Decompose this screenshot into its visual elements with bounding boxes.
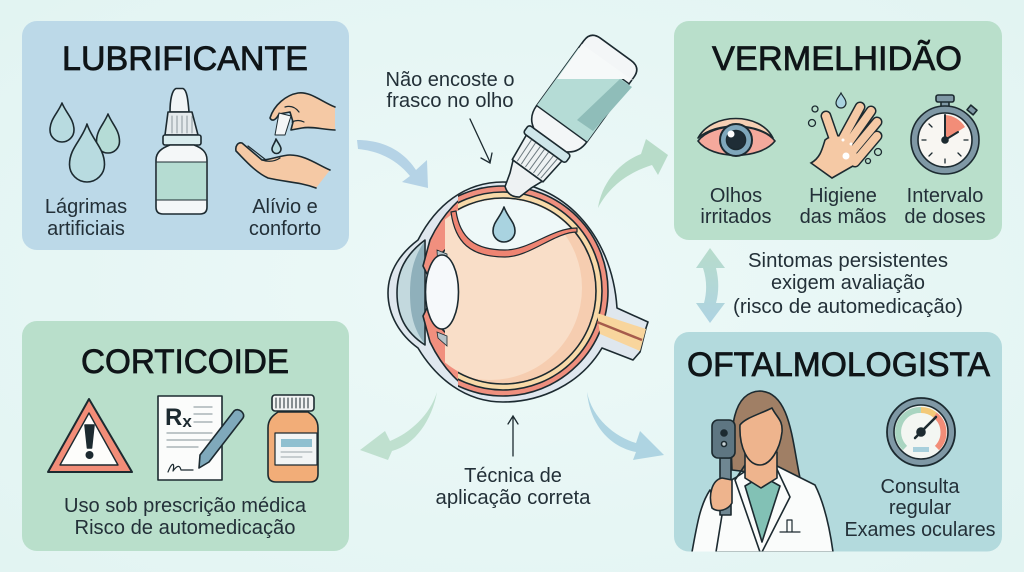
label: lágrimas artificiais bbox=[45, 196, 127, 240]
sclera bbox=[388, 182, 648, 402]
label: intervalo de doses: Intervalo bbox=[907, 185, 983, 207]
callout: sintomas persistentes: Sintomas persistentes bbox=[748, 250, 948, 272]
label: uso sob prescrição médica, risco de automedicação bbox=[64, 495, 307, 539]
label: higiene das mãos: das mãos bbox=[800, 206, 886, 228]
label: higiene das mãos: Higiene bbox=[809, 185, 877, 207]
callout: não encoste o frasco: Não encoste o bbox=[386, 69, 514, 91]
icon: three drops bbox=[50, 103, 120, 182]
label: consulta regular, exames oculares: Exames oculares bbox=[844, 519, 996, 541]
icon: hands with drop bbox=[236, 93, 335, 188]
icon: prescription and pen bbox=[158, 396, 244, 480]
callout: sintomas persistentes: exigem avaliação bbox=[771, 272, 925, 294]
arrow: eye to oftalmologista bbox=[587, 392, 664, 460]
label: olhos irritados bbox=[700, 185, 772, 228]
label: alívio e conforto bbox=[249, 196, 321, 240]
label: olhos irritados: irritados bbox=[700, 206, 772, 228]
label: alívio e conforto: conforto bbox=[249, 218, 321, 240]
membrane bbox=[451, 211, 577, 257]
panel: corticoide bbox=[22, 321, 349, 551]
label: consulta regular, exames oculares: Consulta bbox=[881, 476, 960, 498]
label: consulta regular, exames oculares bbox=[844, 476, 996, 541]
suspensory fibres bbox=[437, 250, 447, 346]
ciliary body bottom bbox=[423, 306, 495, 394]
bottle liquid highlights bbox=[557, 44, 635, 131]
label: intervalo de doses: de doses bbox=[904, 206, 986, 228]
callout: técnica de aplicação correta: Técnica de bbox=[464, 465, 562, 487]
callout: não encoste o frasco bbox=[386, 69, 514, 112]
lens bbox=[426, 255, 458, 329]
drop bbox=[493, 207, 515, 242]
cornea chamber bbox=[397, 240, 425, 345]
illustration: eye cross-section bbox=[388, 182, 648, 402]
panel: vermelhidão bbox=[674, 21, 1002, 240]
label: intervalo de doses bbox=[904, 185, 986, 228]
label: uso sob prescrição médica, risco de automedicação: Uso sob prescrição médica bbox=[64, 495, 307, 517]
label: olhos irritados: Olhos bbox=[710, 185, 762, 207]
heading: oftalmologista: OFTALMOLOGISTA bbox=[687, 346, 990, 384]
icon: prescription and pen: x bbox=[182, 412, 192, 431]
icon: prescription and pen: R bbox=[165, 404, 182, 431]
arrow: eye to corticoide bbox=[360, 392, 437, 460]
panel: lubrificante bbox=[22, 21, 349, 250]
callout: não encoste o frasco: frasco no olho bbox=[386, 90, 514, 112]
heading: lubrificante: LUBRIFICANTE bbox=[62, 40, 308, 78]
arrow: callout to eye bbox=[470, 119, 492, 163]
icon: irritated eye bbox=[698, 118, 775, 156]
optic nerve bbox=[597, 313, 646, 351]
heading: vermelhidão: VERMELHIDÃO bbox=[712, 40, 962, 78]
label: uso sob prescrição médica, risco de automedicação: Risco de automedicação bbox=[74, 517, 296, 539]
callout: técnica de aplicação correta: aplicação correta bbox=[436, 487, 591, 509]
arrow: eye to vermelhidão bbox=[598, 139, 668, 208]
callout: técnica de aplicação correta bbox=[436, 465, 591, 509]
illustration: doctor with ophthalmoscope bbox=[692, 391, 833, 552]
heading: corticoide: CORTICOIDE bbox=[81, 343, 289, 381]
arrow: lubrificante to eye bbox=[357, 140, 428, 188]
panel: oftalmologista bbox=[674, 332, 1002, 552]
icon: hand hygiene bbox=[808, 93, 882, 178]
callout: sintomas persistentes bbox=[733, 250, 963, 318]
illustration: eye drop bottle bbox=[485, 31, 641, 213]
label: alívio e conforto: Alívio e bbox=[252, 196, 318, 218]
callout: sintomas persistentes: (risco de automedicação) bbox=[733, 296, 963, 318]
icon: dropper bottle bbox=[156, 88, 207, 214]
label: lágrimas artificiais: Lágrimas bbox=[45, 196, 127, 218]
arrow: technique to eye bbox=[508, 416, 518, 456]
label: lágrimas artificiais: artificiais bbox=[47, 218, 125, 240]
label: higiene das mãos bbox=[800, 185, 886, 228]
ciliary body top bbox=[423, 188, 495, 276]
label: consulta regular, exames oculares: regular bbox=[889, 497, 951, 519]
icon: warning triangle bbox=[48, 399, 132, 472]
icon: medicine jar bbox=[268, 395, 318, 482]
icon: stopwatch bbox=[911, 95, 979, 174]
icon: pressure gauge bbox=[887, 398, 955, 466]
vitreous bbox=[445, 199, 595, 383]
arrow: vermelhidão to oftalmologista bbox=[696, 248, 725, 323]
choroid and retina ring bbox=[458, 185, 609, 397]
